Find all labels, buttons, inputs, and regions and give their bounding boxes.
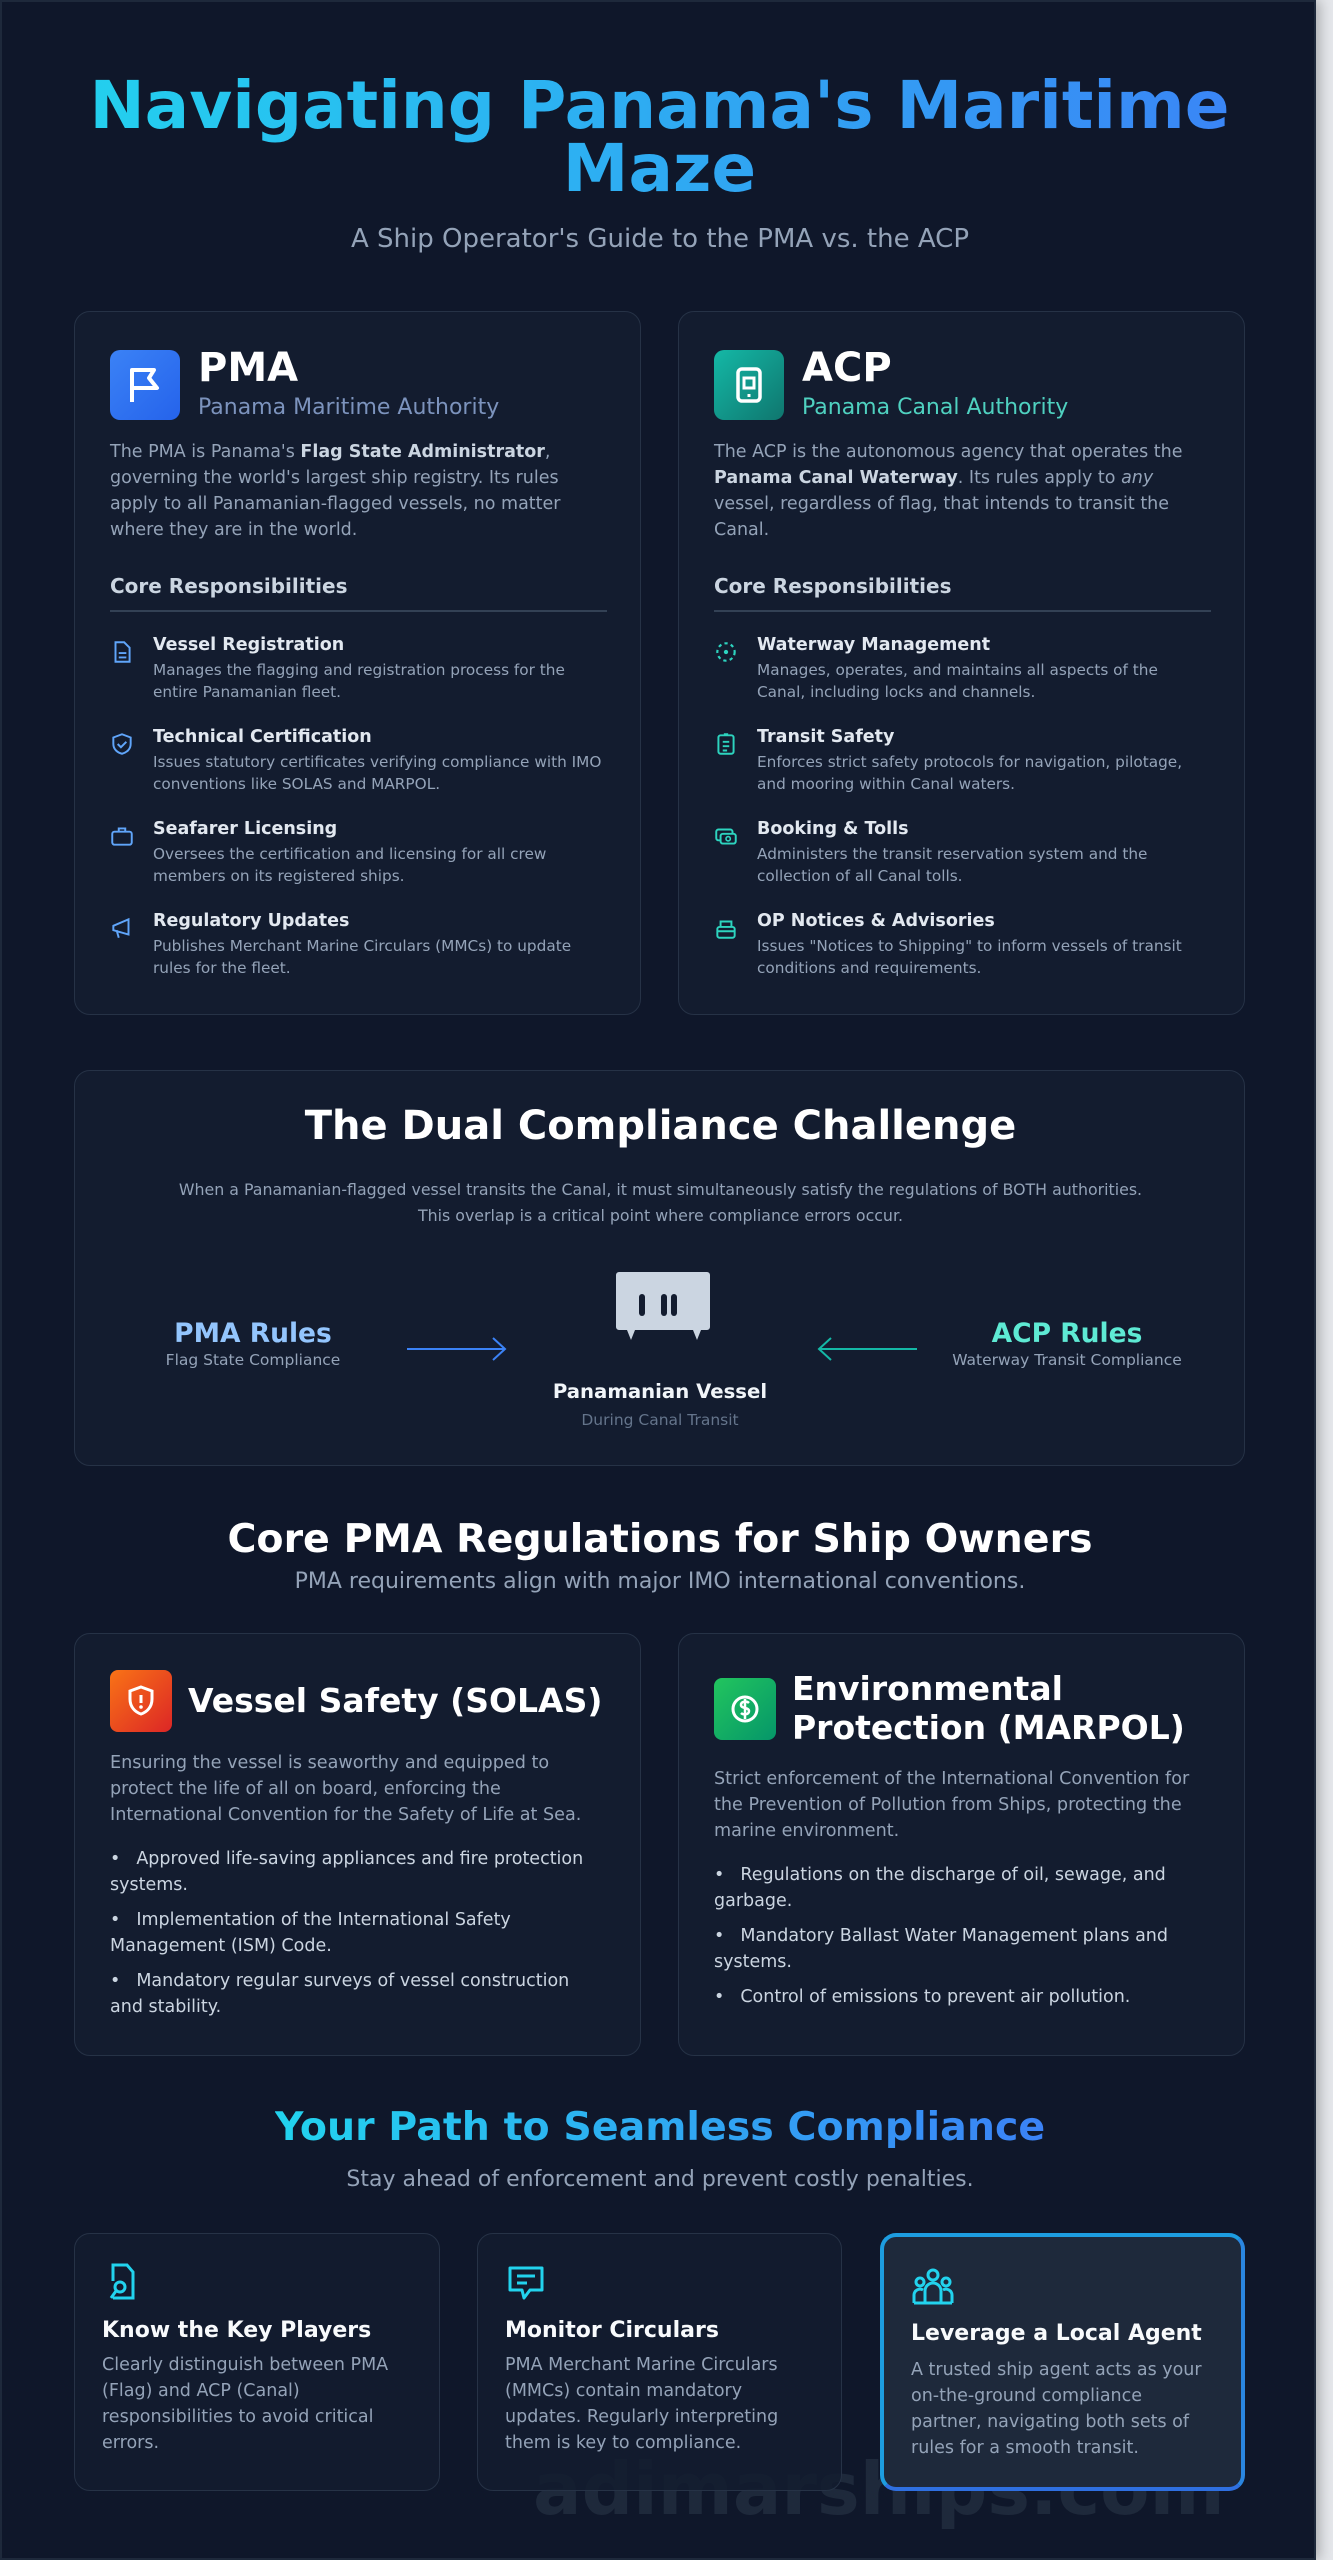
panel: PMA: Vessel Registration xyxy=(153,635,344,655)
panel: PMA: Seafarer Licensing xyxy=(153,819,337,839)
card: key players: Clearly distinguish between PMA (Flag) and ACP (Canal) responsibilities to avoid critical errors. xyxy=(102,2355,388,2453)
label: ACP rules xyxy=(952,1318,1182,1369)
panel: PMA: Issues statutory certificates verifying compliance with IMO conventions like SOLAS and MARPOL. xyxy=(153,753,601,793)
item: booking tolls xyxy=(715,819,1147,885)
heading: core PMA regulations: Core PMA Regulations for Ship Owners xyxy=(227,1516,1093,1562)
heading: core responsibilities: Core Responsibilities xyxy=(714,574,952,598)
panel: ACP xyxy=(678,311,1245,1015)
description: When a Panamanian-flagged vessel transits the Canal, it must simultaneously satisfy the regulations of BOTH authorities. This overlap is a critical point where compliance errors occur. xyxy=(179,1180,1142,1225)
title xyxy=(32,74,1287,200)
card: monitor circulars: PMA Merchant Marine Circulars (MMCs) contain mandatory updates. Regularly interpreting them is key to compliance. xyxy=(505,2355,778,2453)
card: key players: Know the Key Players xyxy=(102,2318,371,2343)
label: vessel xyxy=(553,1380,767,1429)
item: waterway management xyxy=(716,635,1158,701)
bullet list: Mandatory regular surveys of vessel construction and stability. xyxy=(110,1971,569,2017)
subheading: Stay ahead of enforcement and prevent costly penalties. xyxy=(346,2167,974,2192)
panel: PMA: Oversees the certification and licensing for all crew members on its registered ships. xyxy=(153,845,546,885)
subheading: PMA requirements align with major IMO international conventions. xyxy=(295,1569,1025,1594)
arrow: left xyxy=(818,1337,917,1361)
bullet list: Control of emissions to prevent air pollution. xyxy=(740,1987,1130,2007)
heading: Vessel Safety (SOLAS) xyxy=(188,1681,602,1720)
card: local agent (highlighted): Leverage a Local Agent xyxy=(911,2321,1202,2346)
item: technical certification xyxy=(112,727,601,793)
panel: ACP: Waterway Management xyxy=(757,635,990,655)
card: monitor circulars: Monitor Circulars xyxy=(505,2318,719,2343)
panel: ACP: OP Notices & Advisories xyxy=(757,911,995,931)
panel: PMA xyxy=(74,311,641,1015)
watermark: adimarships.com xyxy=(533,2447,1225,2531)
description: Strict enforcement of the International Convention for the Prevention of Pollution from Ships, protecting the marine environment. xyxy=(714,1769,1189,1841)
description: Ensuring the vessel is seaworthy and equipped to protect the life of all on board, enforcing the International Convention for the Safety of Life at Sea. xyxy=(110,1753,581,1825)
icon: canal xyxy=(714,350,784,420)
heading: PMA: PMA xyxy=(198,345,298,391)
label: vessel: Panamanian Vessel xyxy=(553,1380,767,1403)
label: ACP rules: Waterway Transit Compliance xyxy=(952,1351,1182,1369)
label: PMA rules: PMA Rules xyxy=(174,1318,332,1349)
item: seafarer licensing xyxy=(111,819,546,885)
card: local agent (highlighted) xyxy=(880,2233,1245,2491)
arrow: right xyxy=(407,1337,506,1361)
panel: PMA: Regulatory Updates xyxy=(153,911,349,931)
bullet list: Approved life-saving appliances and fire protection systems. xyxy=(110,1849,583,1895)
panel: SOLAS xyxy=(74,1633,641,2056)
card: monitor circulars xyxy=(477,2233,842,2491)
panel: PMA: Manages the flagging and registration process for the entire Panamanian fleet. xyxy=(153,661,565,701)
subtitle: A Ship Operator's Guide to the PMA vs. the ACP xyxy=(351,224,969,254)
subheading: Panama Canal Authority xyxy=(802,395,1068,420)
icon: eco xyxy=(714,1678,776,1740)
bullet list xyxy=(714,1865,1168,2007)
panel: ACP: Booking & Tolls xyxy=(757,819,909,839)
panel: PMA: Publishes Merchant Marine Circulars (MMCs) to update rules for the fleet. xyxy=(153,937,571,977)
label: PMA rules: Flag State Compliance xyxy=(166,1351,340,1369)
panel: ACP: Enforces strict safety protocols for navigation, pilotage, and mooring within Canal waters. xyxy=(757,753,1182,793)
icon: vessel xyxy=(616,1272,710,1340)
heading: core responsibilities: Core Responsibilities xyxy=(110,574,348,598)
icon: message xyxy=(508,2266,544,2300)
icon: file search xyxy=(110,2264,134,2300)
heading: Environmental xyxy=(792,1669,1063,1708)
panel: ACP: Transit Safety xyxy=(757,727,894,747)
title: Navigating Panama's Maritime xyxy=(89,67,1230,144)
label: ACP rules: ACP Rules xyxy=(992,1318,1142,1349)
card: local agent (highlighted): A trusted ship agent acts as your on-the-ground compliance partner, navigating both sets of rules for a smooth transit. xyxy=(911,2360,1202,2458)
title: Maze xyxy=(563,130,756,207)
item: vessel registration xyxy=(114,635,565,701)
subheading: Panama Maritime Authority xyxy=(198,395,499,420)
label: vessel: During Canal Transit xyxy=(581,1411,739,1429)
icon: flag xyxy=(110,350,180,420)
icon: users xyxy=(912,2268,954,2304)
heading xyxy=(792,1669,1185,1747)
heading: ACP: ACP xyxy=(802,345,892,391)
description: The PMA is Panama's Flag State Administrator, governing the world's largest ship registry. Its rules apply to all Panamanian-flagged vessels, no matter where they are in the world. xyxy=(110,442,560,540)
item: transit safety xyxy=(717,727,1182,793)
description: The ACP is the autonomous agency that operates the Panama Canal Waterway. Its rules apply to any vessel, regardless of flag, that intends to transit the Canal. xyxy=(714,442,1183,540)
card: key players xyxy=(74,2233,440,2491)
item: notices xyxy=(716,911,1182,977)
bullet list xyxy=(110,1849,583,2017)
panel: ACP: Administers the transit reservation system and the collection of all Canal tolls. xyxy=(757,845,1147,885)
heading: Protection (MARPOL) xyxy=(792,1708,1185,1747)
item: regulatory updates xyxy=(112,911,571,977)
label: PMA rules xyxy=(166,1318,340,1369)
bullet list: Implementation of the International Safety Management (ISM) Code. xyxy=(110,1910,511,1956)
panel: MARPOL xyxy=(678,1633,1245,2056)
panel: dual compliance xyxy=(74,1070,1245,1466)
heading: The Dual Compliance Challenge xyxy=(305,1103,1016,1149)
icon: shield xyxy=(110,1670,172,1732)
bullet list: Mandatory Ballast Water Management plans and systems. xyxy=(714,1926,1168,1972)
panel: PMA: Technical Certification xyxy=(153,727,372,747)
bullet list: Regulations on the discharge of oil, sewage, and garbage. xyxy=(714,1865,1166,1911)
panel: ACP: Manages, operates, and maintains all aspects of the Canal, including locks and channels. xyxy=(757,661,1158,701)
panel: ACP: Issues "Notices to Shipping" to inform vessels of transit conditions and requirements. xyxy=(757,937,1182,977)
heading: path to compliance: Your Path to Seamless Compliance xyxy=(275,2104,1045,2150)
